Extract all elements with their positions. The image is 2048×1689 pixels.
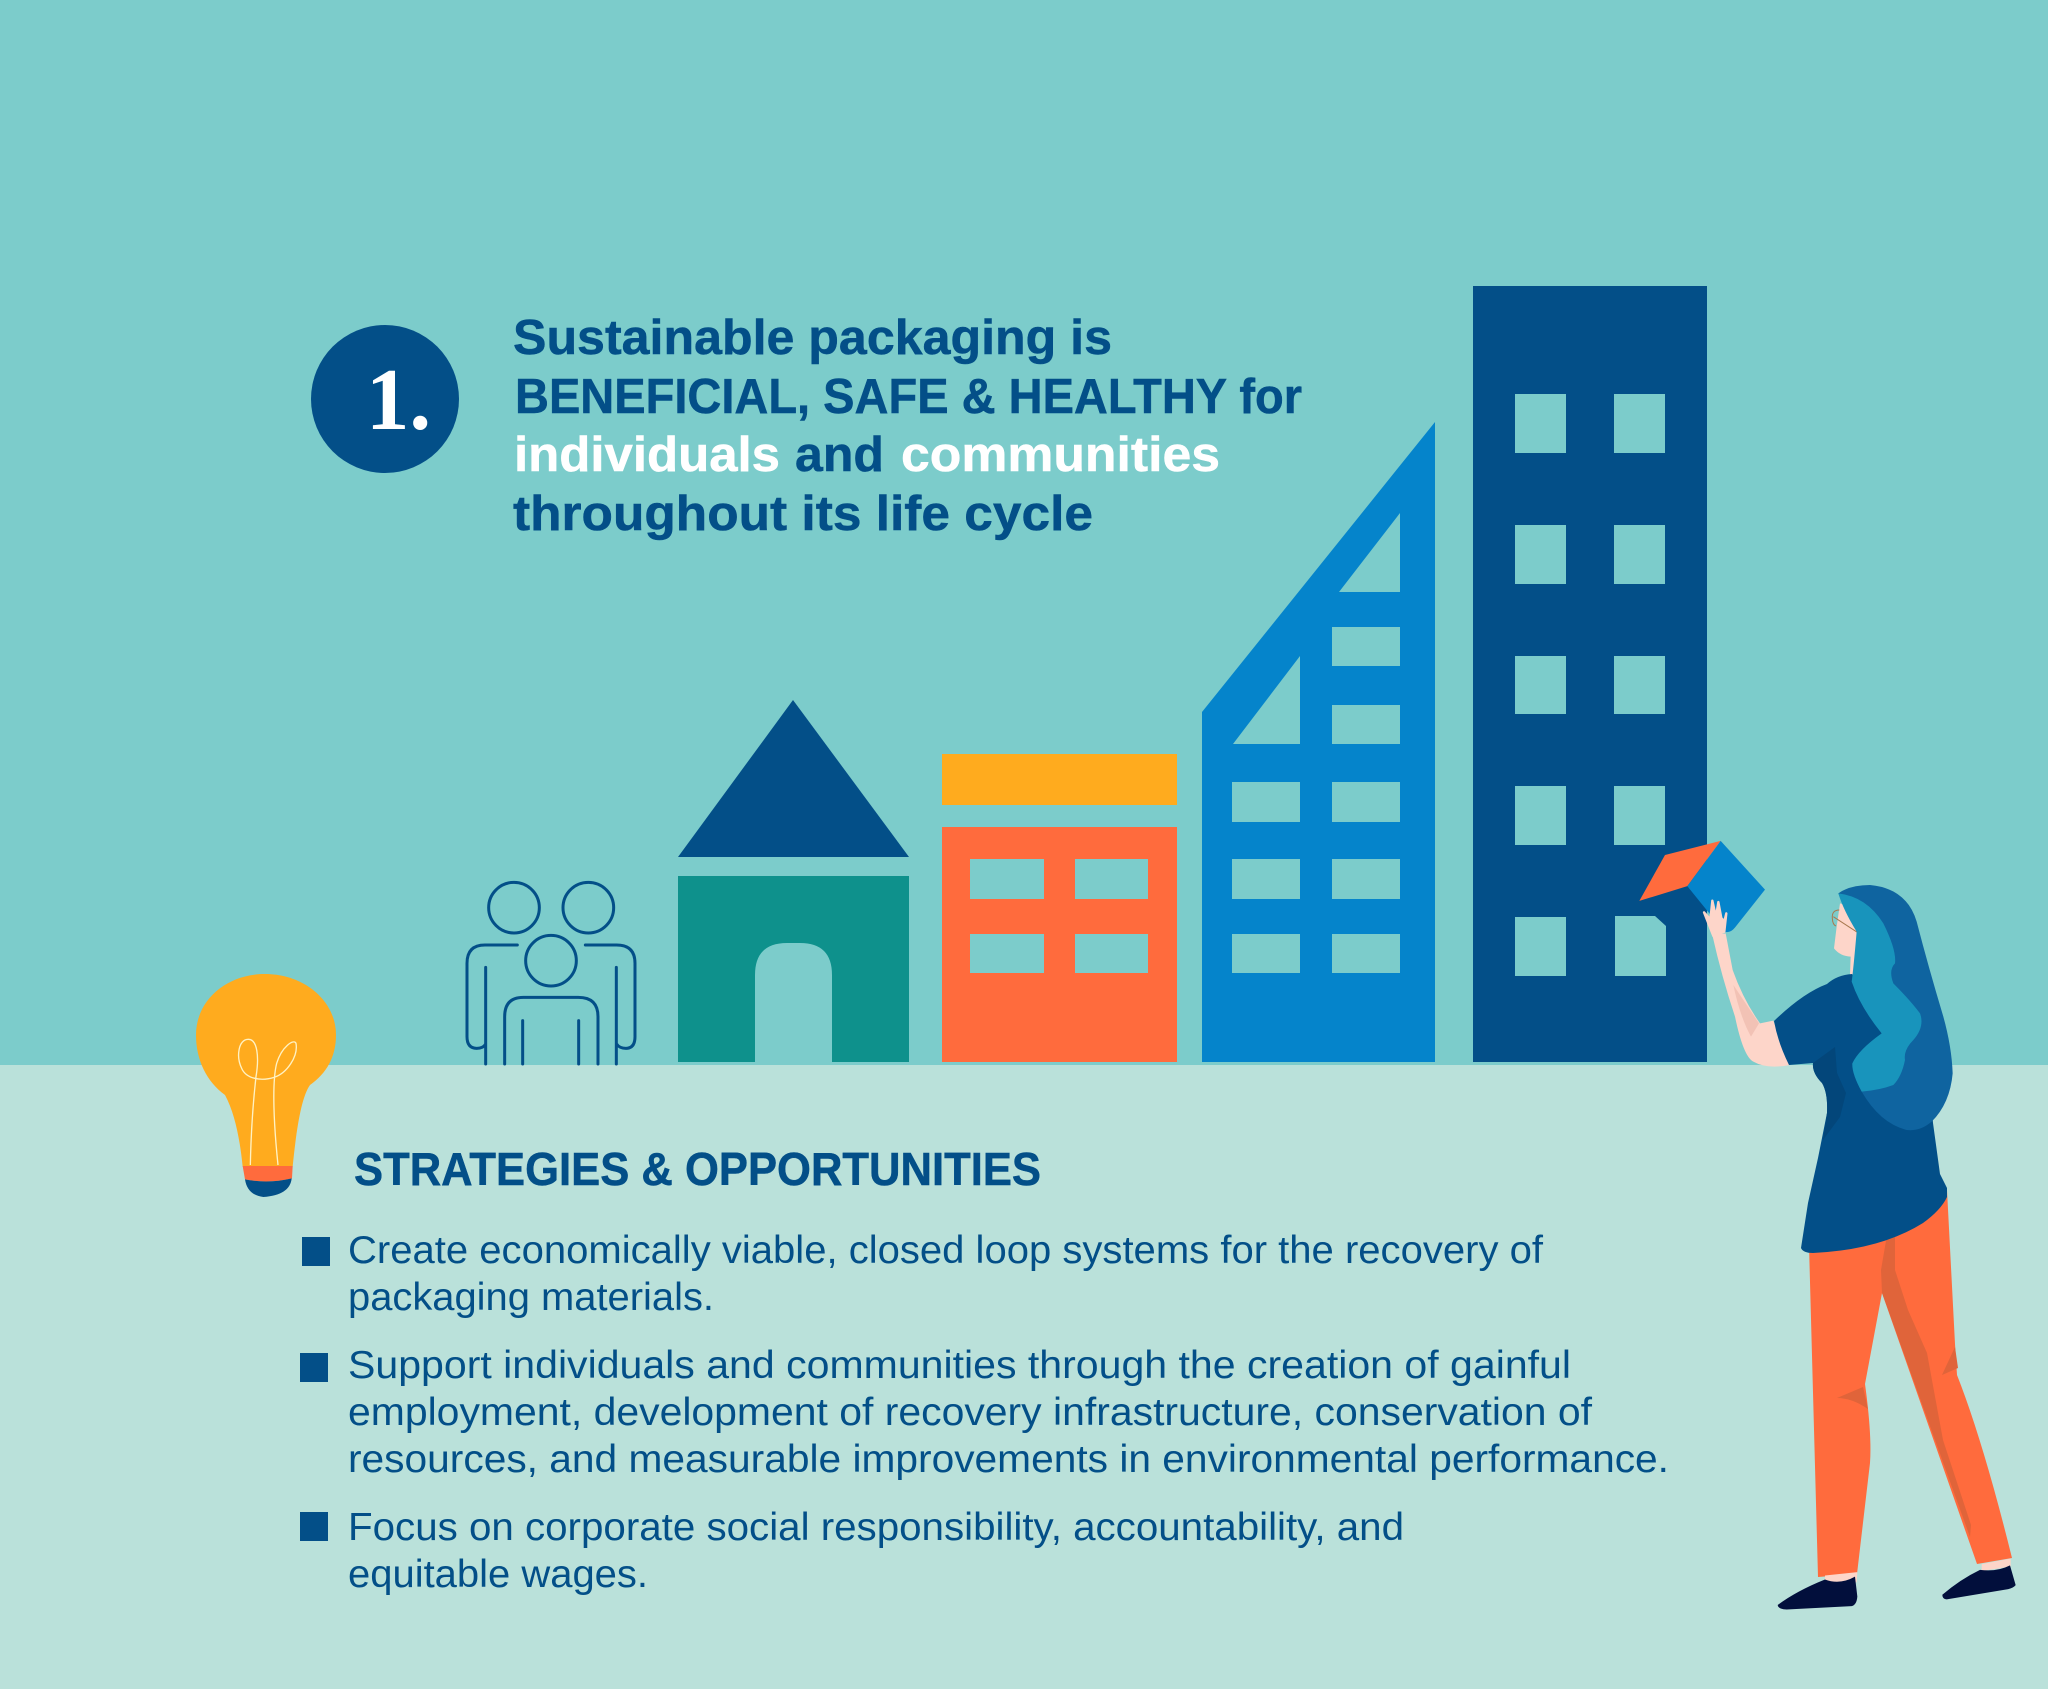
- number badge: 1.: [366, 352, 431, 449]
- bullet 1: Create economically viable, closed loop systems for the recovery of: [348, 1229, 1543, 1272]
- number badge: [311, 325, 459, 473]
- bullet 2: Support individuals and communities through the creation of gainful: [348, 1344, 1571, 1387]
- ankles and shoes: [1778, 1559, 2016, 1610]
- bullet 3: equitable wages.: [348, 1553, 648, 1596]
- headline: and: [795, 428, 884, 482]
- headline: individuals: [514, 428, 780, 482]
- headline: Sustainable packaging is: [513, 311, 1112, 365]
- sky background: [0, 0, 2048, 1065]
- bullet 2: employment, development of recovery infrastructure, conservation of: [348, 1391, 1592, 1434]
- ground background: [0, 1065, 2048, 1689]
- headline: communities: [901, 428, 1220, 482]
- bullet 1: packaging materials.: [348, 1276, 714, 1319]
- icon: light bulb: [196, 974, 336, 1197]
- held box: [1639, 841, 1765, 932]
- shirt: [1774, 974, 1947, 1253]
- pants: [1809, 1190, 2012, 1577]
- building: blue slanted tower: [1202, 422, 1435, 1062]
- headline: BENEFICIAL, SAFE & HEALTHY for: [515, 370, 1302, 424]
- building: dark tower: [1473, 286, 1707, 1062]
- headline: [513, 311, 1302, 541]
- bullet list: [300, 1229, 1669, 1596]
- bullet 3: [300, 1506, 1404, 1596]
- hair: [1838, 885, 1953, 1130]
- bullet 2: resources, and measurable improvements in environmental performance.: [348, 1438, 1669, 1481]
- bullet 2: [300, 1344, 1669, 1481]
- bullet 1: [302, 1229, 1543, 1319]
- icon: people outline: [467, 882, 635, 1064]
- building: house: [678, 700, 909, 1062]
- heading: strategies and opportunities: STRATEGIES & OPPORTUNITIES: [354, 1143, 1041, 1195]
- arm and hand: [1704, 901, 1790, 1067]
- face and neck: [1832, 903, 1862, 975]
- building: orange block: [942, 754, 1177, 1062]
- illustration: woman holding box: [1639, 841, 2016, 1610]
- bullet 3: Focus on corporate social responsibility, accountability, and: [348, 1506, 1404, 1549]
- headline: throughout its life cycle: [513, 487, 1093, 541]
